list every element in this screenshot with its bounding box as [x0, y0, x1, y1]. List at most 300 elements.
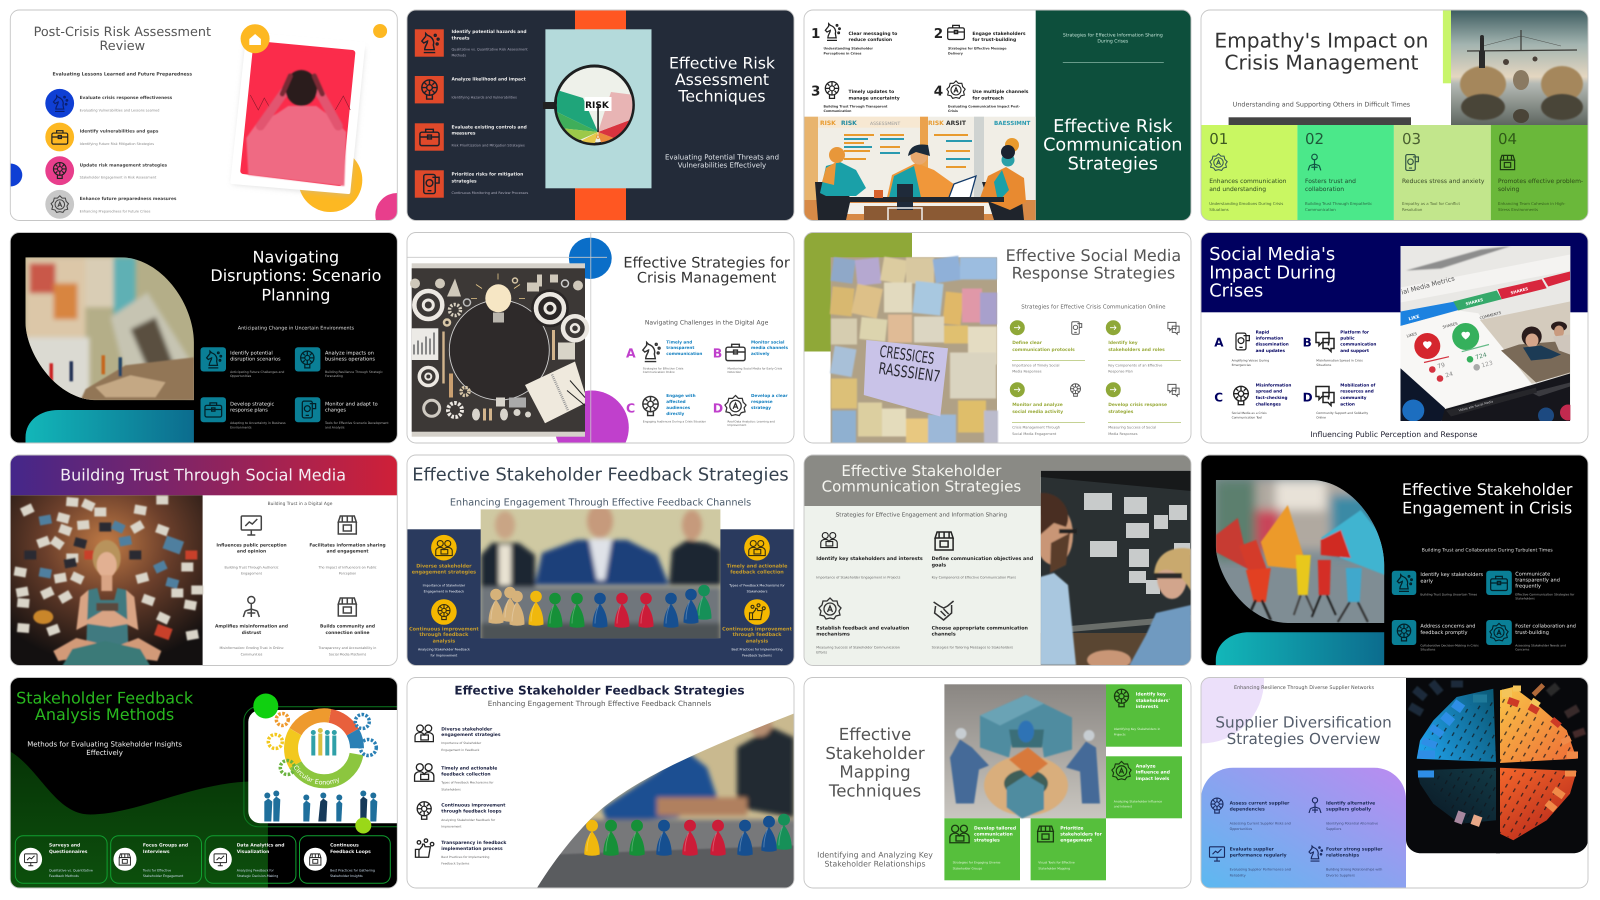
decorative circle: yellow large: [300, 158, 362, 212]
item: builds: Builds community and: [320, 623, 375, 629]
subtitle: Enhancing Resilience Through Diverse Supplier Networks: [1234, 685, 1374, 691]
item: evaluate: Evaluate supplier: [1230, 846, 1275, 852]
slide: Effective Stakeholder Mapping Techniques: [804, 678, 1191, 888]
title: Effective Strategies for: [623, 255, 790, 271]
item A: communication: [666, 351, 702, 356]
subtitle: Navigating Challenges in the Digital Age: [645, 320, 769, 327]
item: identify: early: [1420, 578, 1433, 584]
slide: Effective Stakeholder Feedback Strategies (photo center): [407, 455, 794, 666]
item: continuous left: [409, 599, 479, 658]
gradient header: [10, 455, 397, 495]
item: identify: Identify key stakeholders and interests: [816, 556, 923, 562]
panel: 03: Resolution: [1402, 207, 1423, 212]
item: continuous right: Feedback Systems: [742, 654, 772, 658]
photo: risk magnifier: [543, 29, 652, 188]
item: likelihood: Analyze likelihood and impact: [452, 76, 526, 82]
panel: 03: 03: [1402, 130, 1421, 148]
item: define: [1010, 320, 1085, 374]
item: timely: Building Trust Through Transparent: [824, 105, 888, 109]
subtitle: Evaluating Lessons Learned and Future Preparedness: [52, 72, 192, 78]
item: evaluate: Evaluating Supplier Performance and: [1230, 868, 1291, 872]
item: establish: Establish feedback and evaluation: [816, 626, 910, 632]
item: evaluate: performance regularly: [1230, 852, 1287, 858]
item B: B: [713, 346, 722, 360]
photo: social media metrics: 79: [1437, 362, 1446, 370]
item: clear messaging: Perceptions in Crises: [824, 51, 862, 55]
panel: 04: Stress Environments: [1498, 207, 1538, 212]
item: diverse: [415, 725, 501, 752]
item D: [713, 393, 789, 427]
panel: 01: [1201, 125, 1297, 221]
item A: Communication Online: [643, 370, 675, 374]
panel: 01: Situations: [1209, 207, 1229, 212]
list: risk steps: [415, 29, 529, 198]
panel: 04: [1491, 125, 1588, 221]
slide: Building Trust Through Social Media: [10, 455, 397, 666]
illustration: team at risk boards: ASSESSMENT: [870, 121, 900, 127]
box: analyze: influence and: [1136, 770, 1170, 776]
item: identify: disruption scenarios: [230, 356, 281, 362]
list: four actions: [45, 89, 177, 219]
panel: green title: [1036, 10, 1191, 221]
item C: Social Media as a Crisis: [1232, 411, 1267, 415]
photo: social media metrics: Vidste alle Social Media: [1458, 399, 1494, 412]
item C: C: [626, 400, 635, 416]
item: communicate: Stakeholders: [1515, 596, 1535, 600]
item: enhance: Enhancing Preparedness for Future Crises: [80, 209, 151, 213]
item: influences: Building Trust Through Authentic: [224, 565, 279, 569]
title: Navigating: [253, 247, 339, 266]
item: evaluate: Evaluating Vulnerabilities and Lessons Learned: [80, 108, 159, 112]
item: continuous: through feedback loops: [441, 809, 502, 815]
item: prioritize: strategies: [452, 178, 477, 184]
lime accent bar: [1443, 10, 1451, 83]
subtitle: Building Trust in a Digital Age: [268, 501, 333, 507]
item: diverse: engagement strategies: [412, 570, 476, 576]
item: diverse: Importance of Stakeholder: [423, 584, 466, 588]
item: develop: Develop crisis response: [1108, 402, 1167, 408]
item: analyze: [295, 347, 383, 378]
item: timely: feedback collection: [730, 570, 784, 576]
item A: A: [1214, 336, 1224, 350]
item: continuous right: Continuous improvement: [722, 627, 792, 633]
item: define: Define clear: [1012, 340, 1043, 346]
item A: Emergencies: [1232, 363, 1251, 367]
photo: risk magnifier: 0: [596, 134, 600, 141]
card: data analytics: [205, 836, 296, 883]
title: Analysis Methods: [35, 705, 174, 724]
item: builds: Social Media Platforms: [329, 652, 366, 656]
item: identify: Key Components of an Effective: [1108, 364, 1162, 368]
item: foster: Foster collaboration and: [1515, 624, 1576, 630]
item: assess: Assess current supplier: [1230, 800, 1290, 806]
item: timely: Timely and actionable: [441, 765, 497, 771]
item A: transparent: [666, 345, 694, 350]
item: develop: Environments: [230, 425, 252, 429]
item C: Communication Tool: [1232, 415, 1262, 419]
lilac circle: [1138, 618, 1264, 744]
item: continuous left: analysis: [433, 638, 455, 644]
item: amplifies: Misinformation: Eroding Trust in Online: [219, 646, 284, 650]
illustration: team at risk boards: BAESSIMNT: [994, 120, 1031, 127]
item: choose: channels: [932, 632, 956, 638]
item: analyze: business operations: [325, 356, 375, 362]
slide: Social Media's Impact During Crises: [1201, 232, 1588, 444]
center person: [887, 164, 954, 197]
item: amplifies: Communities: [241, 652, 263, 656]
card: data analytics: Data Analytics and: [237, 843, 284, 849]
box: develop: [944, 818, 1020, 880]
item: facilitates: Perception: [339, 571, 356, 575]
item D: D: [713, 400, 723, 416]
box: identify: Identifying Key Stakeholders in: [1114, 727, 1160, 731]
box: analyze: Analyzing Stakeholder Influence: [1114, 799, 1162, 803]
item D: action: [1340, 401, 1355, 406]
item: transparency: Best Practices for Implementing: [441, 855, 489, 859]
item: foster: trust-building: [1515, 630, 1549, 636]
item: monitor: Crisis Management Through: [1012, 426, 1060, 430]
item: foster: Foster strong supplier: [1326, 846, 1383, 852]
item: facilitates: The Impact of Influencers on Public: [317, 565, 377, 569]
chart: circular economy ring: [291, 715, 357, 781]
decorative circle: blue: [569, 238, 612, 279]
box: identify: Projects: [1114, 733, 1126, 737]
footer text: Influencing Public Perception and Response: [1310, 430, 1478, 439]
slide: Stakeholder Feedback Analysis Methods: [10, 678, 397, 888]
slide: Effective Strategies for Crisis Management: [407, 232, 794, 464]
item: channels: Evaluating Communication Impact Post-: [948, 105, 1021, 109]
panel: green title: Strategies: [1068, 154, 1158, 174]
ring caption: Circular Eonomy: [294, 766, 339, 785]
photo: social media metrics: SHARES: [1442, 321, 1459, 329]
item: communicate: frequently: [1515, 584, 1541, 590]
subtitle: Understanding and Supporting Others in Difficult Times: [1233, 101, 1411, 109]
item: continuous: Continuous improvement: [441, 803, 506, 809]
item: transparency: implementation process: [441, 846, 503, 852]
item: monitor: Monitor and adapt to: [325, 401, 378, 407]
item: update: Stakeholder Engagement in Risk Assessment: [80, 176, 157, 180]
item: influences: Influences public perception: [216, 542, 287, 548]
item B: media channels: [751, 345, 788, 350]
item: choose: Choose appropriate communication: [932, 626, 1028, 632]
dark bar: [1229, 117, 1411, 125]
photo: social media metrics: 123: [1481, 360, 1494, 369]
item D: [1303, 383, 1376, 419]
item: foster: Concerns: [1515, 647, 1530, 651]
item: monitor: and Analysis: [325, 425, 345, 429]
item A: Amplifying Voices During: [1232, 358, 1269, 362]
item: develop: Develop strategic: [230, 401, 275, 407]
item: evaluate: [1210, 846, 1291, 877]
subtitle: Vulnerabilities Effectively: [678, 162, 766, 170]
panel: 01: Enhances communication: [1209, 178, 1287, 185]
item: define: [932, 532, 1034, 580]
item B: and support: [1340, 348, 1369, 353]
subtitle: Building Trust and Collaboration During Turbulent Times: [1422, 547, 1553, 553]
item: diverse: Engagement in Feedback: [441, 748, 480, 752]
title: Assessment: [675, 70, 769, 89]
item: likelihood: Identifying Hazards and Vulnerabilities: [452, 95, 517, 99]
item: evaluate: [45, 89, 173, 118]
title: Building Trust Through Social Media: [60, 466, 346, 485]
item: engage: for trust-building: [972, 37, 1016, 43]
title: Communication Strategies: [822, 477, 1021, 495]
item: transparency: Transparency in feedback: [441, 840, 507, 846]
photo: social media metrics: 24: [1445, 371, 1454, 379]
item: engage: Engage stakeholders: [972, 31, 1026, 37]
navy block: [407, 529, 794, 666]
item: continuous left: for Improvement: [430, 654, 458, 658]
item: develop: Measuring Success of Social: [1108, 426, 1156, 430]
item: channels: for outreach: [972, 95, 1004, 101]
box: identify: [1106, 684, 1182, 747]
item: timely: 3: [811, 84, 820, 100]
item: develop: strategies: [1108, 409, 1134, 415]
item: establish: Measuring Success of Stakeholder Communication: [816, 646, 900, 650]
item: continuous left: Continuous improvement: [409, 627, 479, 633]
item B: [1303, 329, 1376, 367]
decorative circle: yellow small: [373, 24, 387, 38]
subtitle: Enhancing Engagement Through Effective Feedback Channels: [450, 497, 751, 508]
icon: house badge: [241, 24, 270, 53]
box: prioritize: Prioritize: [1060, 825, 1083, 831]
item: timely: feedback collection: [441, 771, 491, 777]
item: monitor: social media activity: [1012, 409, 1063, 415]
card: surveys: Surveys and: [49, 843, 80, 849]
photo: blurred team with pegs: [480, 504, 721, 647]
item A: [626, 339, 702, 374]
item: controls: Evaluate existing controls and: [452, 124, 527, 130]
photo: colored quadrants: [1406, 678, 1588, 854]
card: surveys: Qualitative vs. Quantitative: [49, 868, 93, 872]
item: continuous right: [722, 599, 792, 658]
item: establish: Efforts: [816, 650, 827, 654]
item: clear messaging: reduce confusion: [848, 37, 892, 43]
item: clear messaging: Understanding Stakeholder: [824, 47, 873, 51]
card: continuous feedback: Best Practices for Gathering: [330, 868, 375, 872]
item: diverse: Importance of Stakeholder: [441, 741, 482, 745]
item C: directly: [666, 411, 685, 416]
item C: Engage with: [666, 393, 696, 398]
title: Stakeholder Feedback: [16, 688, 194, 707]
item: continuous right: through feedback: [733, 632, 782, 638]
title: Review: [99, 39, 145, 54]
item: define: communication protocols: [1012, 347, 1075, 353]
item: establish: mechanisms: [816, 632, 850, 638]
item B: [713, 339, 788, 374]
title: Effective Stakeholder: [841, 462, 1002, 480]
subtitle: Strategies for Effective Crisis Communication Online: [1021, 304, 1166, 311]
item: amplifies: Amplifies misinformation and: [215, 623, 288, 629]
photo: social media metrics: LIKES: [1406, 331, 1418, 338]
panel: 01: and understanding: [1209, 186, 1266, 193]
box: analyze: impact levels: [1136, 776, 1170, 782]
decorative circle: purple: [555, 390, 629, 464]
item: builds: [318, 598, 376, 656]
decorative circle: blue: [10, 164, 22, 186]
item D: Mobilization of: [1340, 383, 1376, 388]
item: timely: [811, 82, 900, 113]
item: continuous: Analyzing Stakeholder Feedback for: [441, 818, 496, 822]
box: develop: Strategies for Engaging Diverse: [953, 861, 1001, 865]
item: clear messaging: [811, 24, 897, 55]
item: controls: measures: [452, 132, 476, 137]
green wave: [10, 752, 268, 888]
item: address: [1392, 620, 1479, 651]
item: identify: Identifying Potential Alternative: [1326, 821, 1378, 825]
photo: lightbulb on dark board: [410, 263, 587, 437]
photo: collapsed building: [26, 257, 194, 402]
item: facilitates: Facilitates information sharing: [309, 542, 386, 548]
item: identify: stakeholders and roles: [1108, 347, 1165, 353]
box: prioritize: [1031, 818, 1106, 880]
slide: Effective Social Media Response Strategies: [804, 232, 1191, 444]
card: focus groups: Interviews: [143, 849, 170, 855]
item: define: Key Components of Effective Communication Plans: [932, 576, 1016, 580]
item A: Strategies for Effective Crisis: [643, 366, 684, 370]
item C: affected: [666, 399, 686, 404]
item: evaluate: Evaluate crisis response effectiveness: [80, 95, 173, 101]
teal shape: [26, 410, 194, 443]
illustration: team at risk boards: [804, 117, 1036, 221]
photo: pegs in curved frame: [527, 708, 797, 890]
item: timely: [415, 764, 497, 791]
item: identify: [200, 347, 284, 378]
box: identify: Identify key: [1136, 692, 1166, 698]
item D: community: [1340, 395, 1367, 400]
item: develop: Media Responses: [1108, 432, 1138, 436]
photo: sticky notes wall: CRESSICES: [878, 342, 936, 368]
title: Effective Stakeholder Feedback Strategies: [454, 683, 745, 697]
item: builds: connection online: [326, 630, 370, 636]
item: address: Situations: [1420, 647, 1436, 651]
item: identify: Building Trust During Uncertain Times: [1420, 593, 1478, 597]
item: evaluate: Reliability: [1230, 873, 1246, 877]
item: analyze: Building Resilience Through Strategic: [325, 370, 383, 374]
item: hazards: Qualitative vs. Quantitative Risk Assessment: [452, 48, 528, 52]
item: analyze: Analyze impacts on: [325, 350, 374, 356]
item A: dissemination: [1256, 342, 1289, 347]
item: assess: dependencies: [1230, 806, 1265, 812]
item: facilitates: [309, 516, 386, 575]
item: identify: [1106, 320, 1181, 374]
item: communicate: Communicate: [1515, 571, 1550, 577]
card: data analytics: Strategic Decision-Making: [237, 874, 278, 878]
decorative circle: pink: [375, 193, 397, 220]
item C: [1214, 383, 1291, 419]
item: hazards: threats: [452, 35, 470, 41]
subtitle: Stakeholder Relationships: [824, 860, 926, 869]
item: identify: Identifying Future Risk Mitigation Strategies: [80, 142, 154, 146]
item B: Monitor social: [751, 339, 785, 344]
item: continuous right: analysis: [746, 638, 768, 644]
title: Disruptions: Scenario: [210, 266, 381, 285]
item: define: Media Responses: [1012, 370, 1042, 374]
item C: challenges: [1256, 401, 1281, 406]
title: Response Strategies: [1012, 263, 1175, 282]
item: develop: Adapting to Uncertainty in Business: [230, 421, 286, 425]
item D: Real-Data Analytics: Learning and: [728, 419, 775, 423]
item B: Detection: [728, 370, 741, 374]
card: data analytics: Visualization: [237, 849, 269, 855]
box: analyze: and Interest: [1114, 805, 1133, 809]
item: identify: Identify vulnerabilities and gaps: [80, 129, 159, 135]
item: monitor: Social Media Engagement: [1012, 432, 1057, 436]
panel: 02: Fosters trust and: [1305, 178, 1356, 185]
photo: sticky notes wall: [830, 256, 998, 444]
item D: strategy: [751, 405, 771, 410]
item D: resources and: [1340, 389, 1374, 394]
card: focus groups: Focus Groups and: [143, 843, 188, 849]
item: diverse: Engagement in Feedback: [424, 589, 464, 593]
decorative circle: lime: [355, 818, 371, 834]
item: prioritize: Prioritize risks for mitigation: [452, 172, 523, 178]
item: monitor: Monitor and analyze: [1012, 402, 1063, 408]
photo: social media metrics: SHARES: [1465, 297, 1484, 306]
item: foster: Diverse Suppliers: [1326, 873, 1355, 877]
box: develop: strategies: [974, 838, 1000, 844]
title: Techniques: [677, 87, 766, 106]
card: surveys: Feedback Methods: [49, 874, 79, 878]
photo: 3D cube and figures: [944, 684, 1106, 818]
item: identify: Identify key stakeholders: [1420, 572, 1484, 578]
item: communicate: [1486, 571, 1575, 600]
title: Impact During: [1209, 262, 1336, 283]
panel: 03: Reduces stress and anxiety: [1402, 178, 1485, 185]
item: develop: response plans: [230, 408, 268, 414]
title: Engagement in Crisis: [1402, 498, 1572, 517]
panel: green title: Communication: [1043, 136, 1183, 156]
item: identify: [1392, 571, 1484, 597]
item: hazards: Identify potential hazards and: [452, 29, 527, 35]
card: surveys: [15, 836, 107, 883]
item: amplifies: [215, 596, 288, 656]
title: Stakeholder: [825, 744, 925, 763]
item: foster: Building Strong Relationships with: [1326, 868, 1382, 872]
item: foster: Assessing Stakeholder Needs and: [1515, 644, 1566, 648]
item: monitor: Tools for Effective Scenario Development: [324, 421, 389, 425]
item B: communication: [1340, 342, 1376, 347]
item: update: Update risk management strategies: [80, 162, 167, 168]
item: continuous: [417, 802, 506, 829]
item: timely: [727, 535, 788, 593]
item: timely: Stakeholders: [747, 589, 768, 593]
panel: green title: During Crises: [1097, 38, 1129, 44]
card: continuous feedback: Feedback Loops: [330, 849, 371, 855]
box: develop: Stakeholder Groups: [953, 867, 983, 871]
item: diverse: [412, 535, 476, 593]
item C: Engaging Audiences During a Crisis Situation: [643, 419, 706, 423]
panel: 02: collaboration: [1305, 186, 1344, 193]
item: continuous left: through feedback: [419, 632, 469, 638]
title: Effective Stakeholder Feedback Strategies: [412, 465, 789, 486]
item: foster: [1486, 620, 1576, 651]
item: identify: Anticipating Future Challenges and: [230, 370, 284, 374]
laptop, table top, chair frame: [948, 176, 976, 200]
box: develop: Develop tailored: [974, 825, 1016, 831]
box: develop: communication: [974, 831, 1013, 837]
orange vertical bar: [575, 10, 626, 221]
item: address: Address concerns and: [1420, 624, 1475, 630]
item: monitor: [1010, 382, 1085, 436]
item: identify: suppliers globally: [1326, 806, 1371, 812]
subtitle: Strategies for Effective Engagement and Information Sharing: [836, 512, 1008, 519]
item: facilitates: and engagement: [327, 548, 368, 554]
item: diverse: Diverse stakeholder: [416, 563, 472, 569]
card: continuous feedback: [300, 836, 390, 883]
subtitle: Methods for Evaluating Stakeholder Insights: [27, 740, 182, 748]
photo: megaphones: [1216, 480, 1385, 623]
